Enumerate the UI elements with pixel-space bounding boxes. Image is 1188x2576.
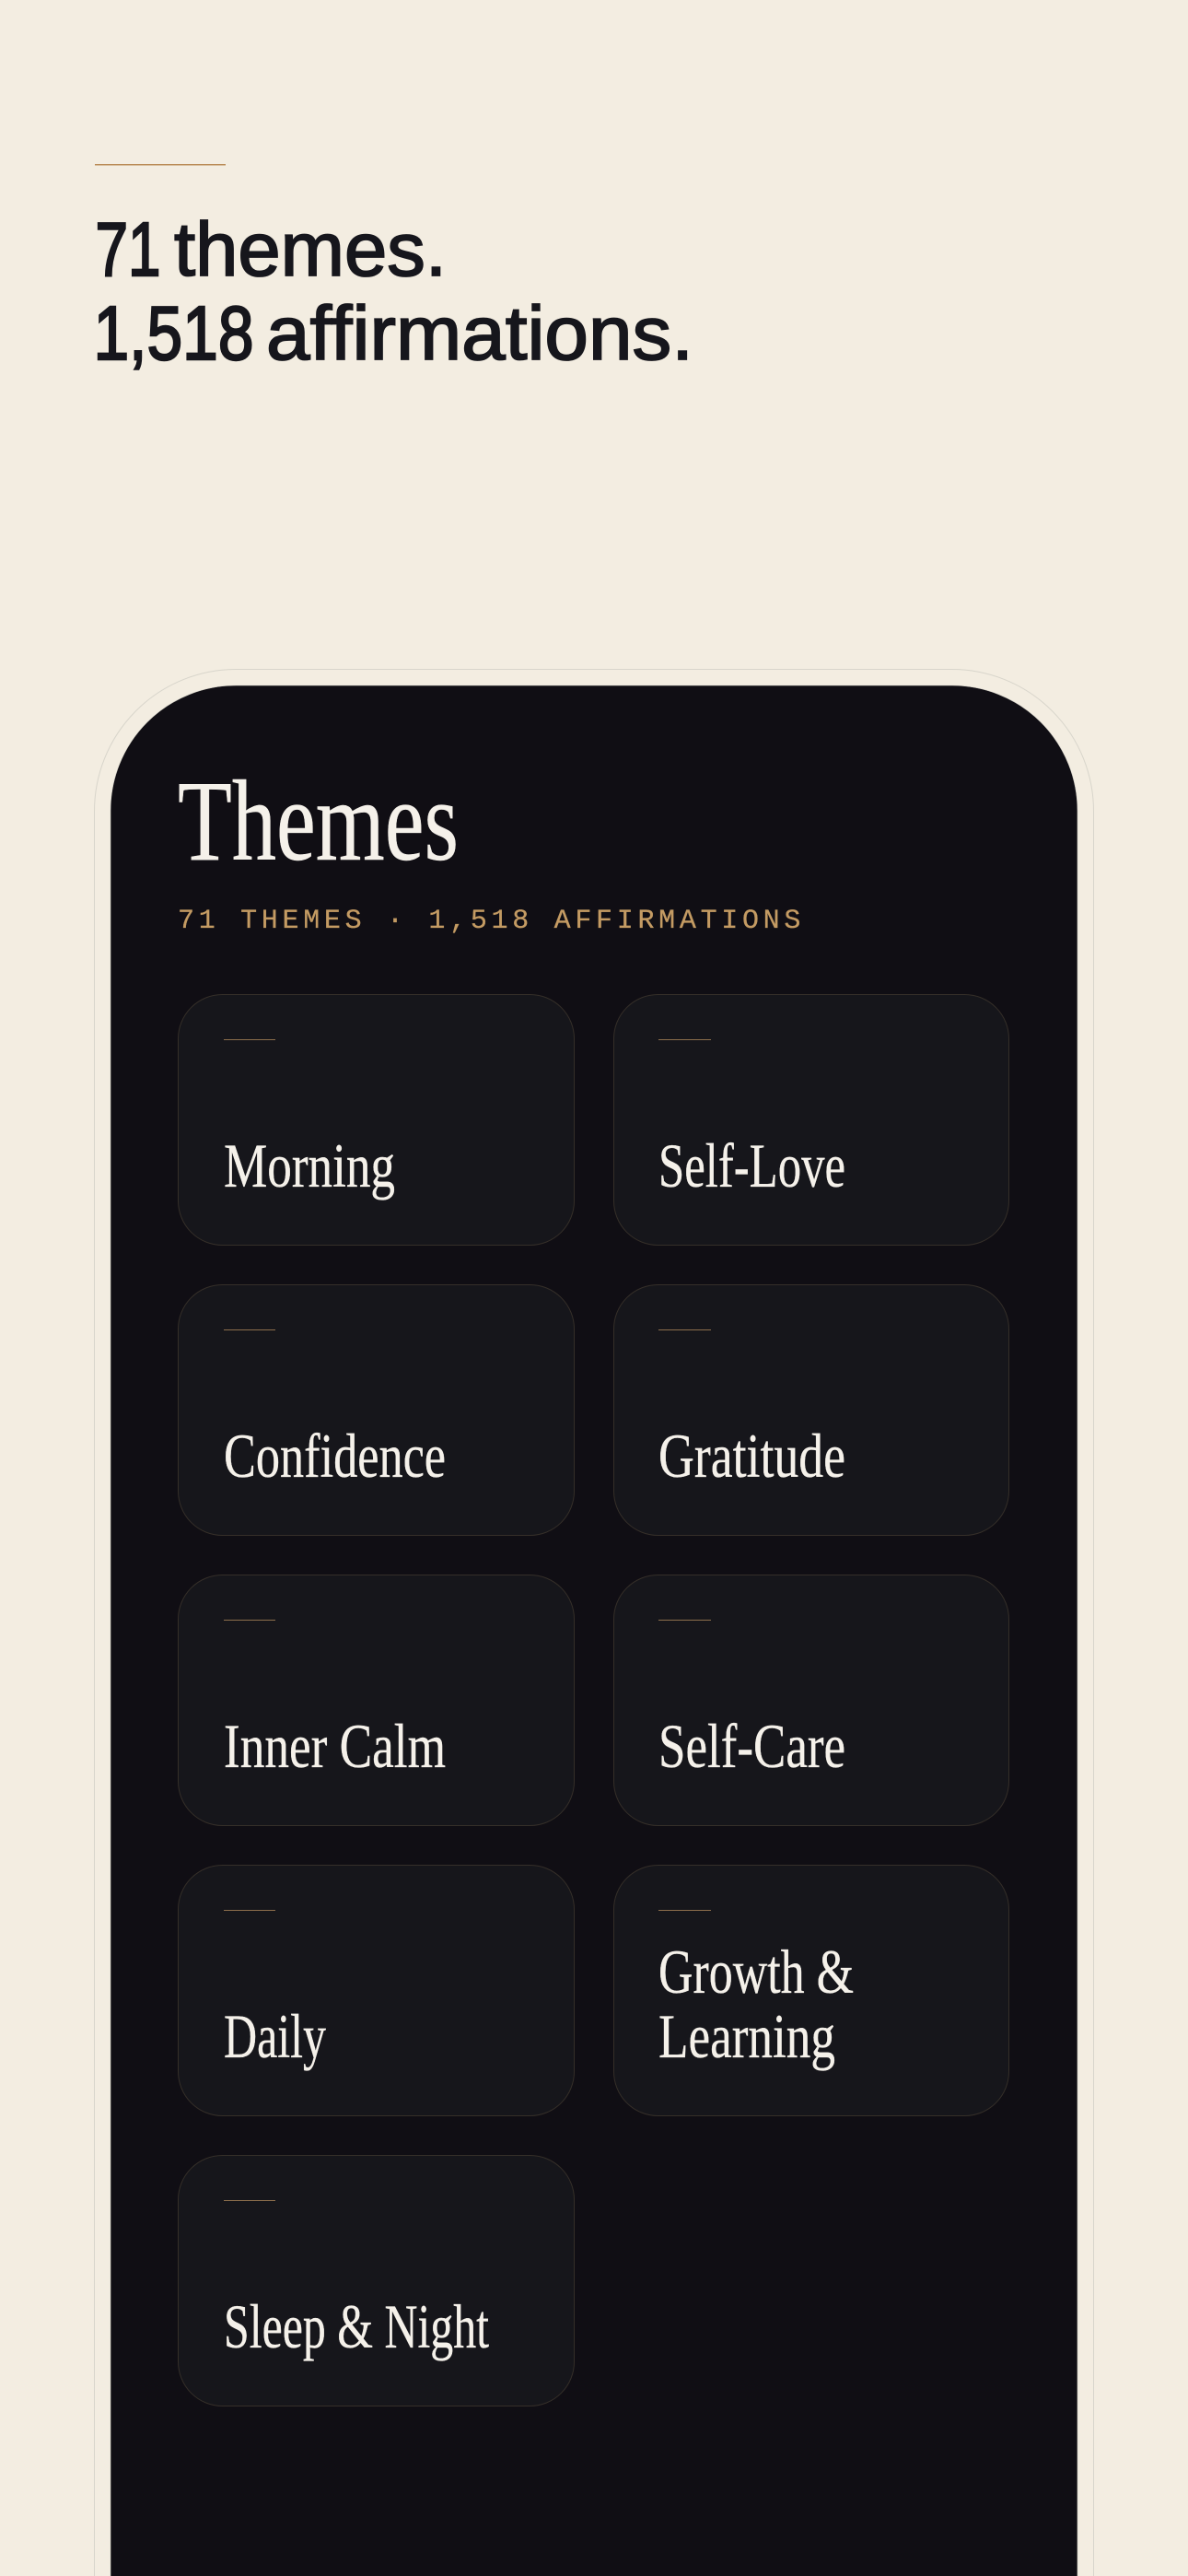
- card: Daily: [179, 1865, 575, 2115]
- phone screen: [111, 685, 1077, 2576]
- card: Self-Care: [613, 1575, 1009, 1826]
- heading: 1,518: [94, 290, 254, 376]
- card: Morning: Morning: [224, 1130, 395, 1200]
- accent rule above heading: [95, 164, 226, 166]
- screen title: Themes: [178, 758, 459, 885]
- screen subtitle: 71 THEMES · 1,518 AFFIRMATIONS: [178, 906, 805, 937]
- card: Self-Care: Self-Care: [658, 1711, 845, 1781]
- card: Growth & Learning: Learning: [658, 2001, 835, 2071]
- card: Gratitude: [613, 1284, 1009, 1535]
- card: Inner Calm: [179, 1575, 575, 1826]
- heading: themes.: [174, 206, 447, 292]
- panel: phone mockup: [94, 669, 1094, 2576]
- card: Growth & Learning: Growth &: [658, 1937, 854, 2007]
- card: Morning: [179, 995, 575, 1246]
- card: Daily: Daily: [224, 2001, 326, 2071]
- card: Self-Love: Self-Love: [658, 1130, 845, 1200]
- card: Confidence: [179, 1284, 575, 1535]
- card: Sleep & Night: [179, 2156, 575, 2406]
- card: Gratitude: Gratitude: [658, 1421, 845, 1491]
- heading: 71: [96, 206, 160, 292]
- card: Growth & Learning: [613, 1865, 1009, 2115]
- card: Confidence: Confidence: [224, 1421, 446, 1491]
- card: Sleep & Night: Sleep & Night: [224, 2291, 489, 2361]
- heading: [94, 206, 693, 376]
- phone outer outline: [94, 669, 1094, 2576]
- card: Self-Love: [613, 995, 1009, 1246]
- heading: affirmations.: [266, 290, 693, 376]
- card: Inner Calm: Inner Calm: [224, 1711, 446, 1781]
